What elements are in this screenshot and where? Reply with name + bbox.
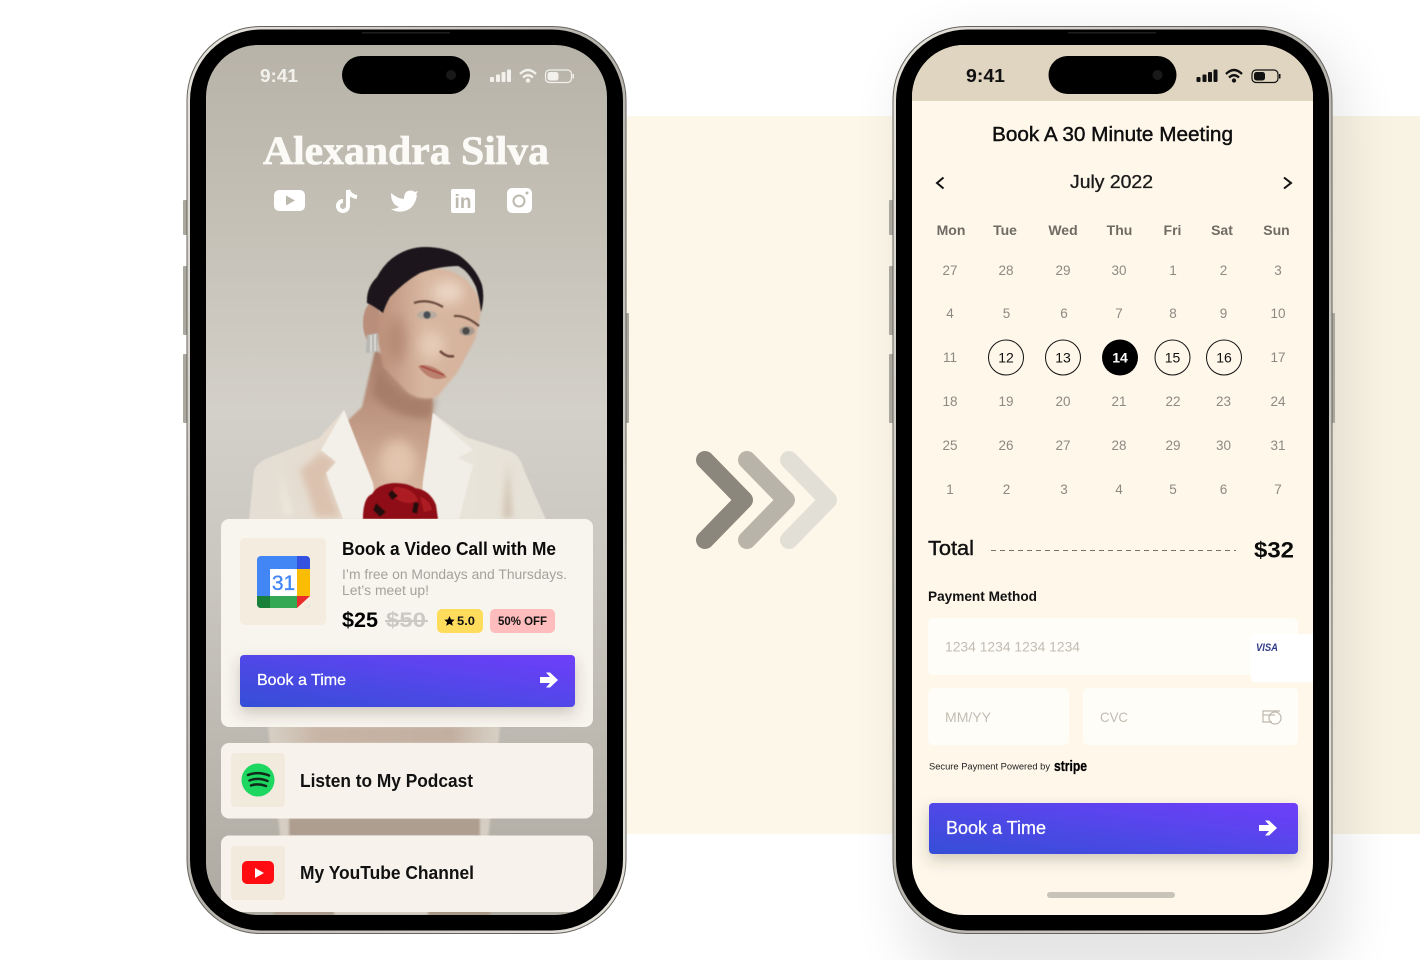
- month navigation: [937, 172, 1291, 192]
- icon: tiktok: [338, 190, 357, 211]
- weekday headers: Sun: [1263, 222, 1290, 238]
- cvc field: CVC: [1100, 709, 1128, 725]
- expiry field: MM/YY: [945, 709, 992, 725]
- card: book a video call: Book a Video Call with Me: [342, 539, 556, 559]
- calendar dates: 8: [1169, 306, 1177, 321]
- ear: [362, 304, 380, 340]
- weekday headers: [937, 222, 1290, 238]
- right status bar: 9:41: [966, 66, 1005, 86]
- nose: [440, 351, 454, 356]
- discount pill: 50% OFF: [498, 614, 547, 628]
- calendar dates: 1: [946, 482, 954, 497]
- available dates: 12: [998, 350, 1014, 366]
- total row: $32: [1254, 538, 1294, 562]
- stripe note: Secure Payment Powered by: [929, 762, 1050, 772]
- calendar dates: 4: [946, 306, 954, 321]
- calendar dates: 3: [1274, 263, 1282, 278]
- calendar dates: 18: [942, 394, 958, 409]
- wifi icon: [1226, 70, 1242, 82]
- brows: [414, 301, 479, 326]
- card number field: 1234 1234 1234 1234: [945, 638, 1080, 654]
- calendar dates: 10: [1270, 306, 1286, 321]
- icon: youtube: [274, 190, 305, 211]
- description: [342, 567, 567, 598]
- card number field: [928, 618, 1321, 682]
- calendar dates: 25: [942, 438, 958, 453]
- price: $25: [342, 609, 378, 632]
- calendar dates: 24: [1270, 394, 1286, 409]
- calendar dates: 21: [1111, 394, 1127, 409]
- calendar dates: 5: [1169, 482, 1177, 497]
- right phone: [889, 26, 1335, 934]
- left phone hardware frame: [183, 26, 629, 934]
- weekday headers: Sat: [1211, 222, 1233, 238]
- left phone screen: [206, 45, 607, 916]
- calendar dates: 22: [1165, 394, 1181, 409]
- rating pill: [437, 609, 483, 633]
- arrow: [1259, 820, 1277, 836]
- card: podcast: [221, 743, 593, 818]
- calendar dates: 29: [1165, 438, 1181, 453]
- calendar dates: 31: [1270, 438, 1286, 453]
- price: $50: [386, 609, 426, 632]
- calendar dates: 11: [943, 350, 957, 365]
- icon: twitter: [391, 190, 418, 212]
- cvc field: [1083, 688, 1298, 745]
- description: Let’s meet up!: [342, 583, 429, 598]
- jacket shading: [280, 452, 512, 518]
- card: podcast: Listen to My Podcast: [300, 771, 473, 791]
- battery icon: [546, 70, 574, 82]
- jacket: [249, 410, 546, 520]
- home indicator: [1047, 892, 1175, 898]
- calendar dates: 28: [1111, 438, 1127, 453]
- name heading: Alexandra Silva: [263, 128, 549, 173]
- total row: Total: [928, 538, 974, 560]
- icon: cvc card: [1263, 711, 1281, 724]
- battery icon: [1252, 70, 1280, 82]
- button: [240, 655, 575, 707]
- jaw shadow: [372, 368, 436, 418]
- right lapel: [420, 413, 473, 519]
- wifi icon: [520, 70, 536, 82]
- calendar dates: 2: [1220, 263, 1227, 278]
- expiry field: [928, 688, 1069, 745]
- stripe note: stripe: [1054, 758, 1087, 775]
- button: Book a Time: [257, 672, 346, 689]
- calendar dates: 23: [1216, 394, 1231, 409]
- face: [378, 268, 482, 399]
- left phone: [183, 26, 629, 934]
- calendar dates: 17: [1270, 350, 1286, 365]
- dynamic island: [1048, 56, 1176, 94]
- calendar dates: 7: [1115, 306, 1123, 321]
- stripe note: [929, 758, 1087, 775]
- right phone screen: [912, 45, 1321, 915]
- neck and chest: [348, 350, 434, 491]
- calendar dates: 26: [998, 438, 1014, 453]
- signal icon: [490, 70, 511, 82]
- card: youtube: [221, 836, 593, 912]
- hair: [367, 247, 483, 313]
- price: [342, 611, 428, 628]
- calendar dates: 27: [942, 263, 958, 278]
- dynamic island: [342, 56, 470, 94]
- background band: [626, 40, 1420, 960]
- card: youtube: My YouTube Channel: [300, 863, 474, 883]
- month navigation: July 2022: [1070, 172, 1153, 192]
- rose: [363, 483, 438, 519]
- icon: linkedin: in: [455, 192, 471, 213]
- face highlights: [387, 280, 464, 364]
- calendar dates: 29: [1055, 263, 1071, 278]
- calendar dates: 7: [1274, 482, 1282, 497]
- calendar dates: 30: [1111, 263, 1127, 278]
- icon: spotify: [242, 764, 274, 796]
- left status bar: [260, 68, 574, 84]
- arrows: [705, 460, 828, 540]
- right phone screen: Book A 30 Minute Meeting: [992, 124, 1233, 146]
- available dates: 15: [1165, 350, 1180, 366]
- lips: [418, 365, 447, 379]
- card number field: VISA: [1256, 642, 1278, 654]
- calendar dates: 3: [1060, 482, 1068, 497]
- weekday headers: Mon: [937, 222, 965, 238]
- calendar dates: 27: [1055, 438, 1071, 453]
- calendar dates: [942, 263, 1286, 497]
- rating pill: 5.0: [457, 614, 475, 628]
- calendar dates: 20: [1055, 394, 1071, 409]
- available dates: 13: [1055, 350, 1071, 366]
- calendar dates: 6: [1060, 306, 1068, 321]
- left status bar: 9:41: [260, 66, 298, 86]
- description: I’m free on Mondays and Thursdays.: [342, 567, 567, 582]
- calendar icon tile: 31: [272, 572, 295, 595]
- eyes: [417, 311, 474, 336]
- calendar dates: 4: [1115, 482, 1123, 497]
- arrow: [540, 672, 558, 688]
- portrait photo: [249, 247, 546, 916]
- right phone screen: Payment Method: [928, 588, 1037, 604]
- calendar dates: 9: [1220, 306, 1227, 321]
- weekday headers: Tue: [993, 222, 1017, 238]
- available dates: [988, 340, 1242, 375]
- icon: instagram: [507, 188, 532, 213]
- calendar dates: 1: [1169, 263, 1177, 278]
- discount pill: [490, 609, 555, 633]
- available dates: 16: [1216, 350, 1232, 366]
- button: [929, 803, 1298, 854]
- social icons: [274, 188, 532, 213]
- calendar dates: 28: [998, 263, 1014, 278]
- calendar dates: 2: [1003, 482, 1010, 497]
- lower body behind cards: [268, 727, 500, 915]
- collarbone highlight: [380, 440, 416, 484]
- selected date: 14: [1112, 350, 1128, 366]
- right status bar: [912, 45, 1313, 101]
- card: book a video call: [221, 519, 593, 727]
- weekday headers: Fri: [1164, 222, 1181, 238]
- left lapel: [321, 410, 378, 519]
- upper body: [249, 247, 546, 520]
- signal icon: [1196, 70, 1218, 82]
- button: Book a Time: [946, 818, 1046, 838]
- icon: youtube red: [242, 861, 274, 884]
- calendar dates: 6: [1220, 482, 1227, 497]
- calendar dates: 30: [1216, 438, 1231, 453]
- weekday headers: Wed: [1048, 222, 1078, 238]
- weekday headers: Thu: [1107, 222, 1132, 238]
- earring: [366, 333, 378, 353]
- total row: [928, 538, 1294, 562]
- selected date: [1102, 340, 1138, 376]
- calendar dates: 5: [1003, 306, 1010, 321]
- icon: linkedin: [451, 189, 475, 213]
- calendar dates: 19: [998, 394, 1014, 409]
- right phone hardware frame: [889, 26, 1335, 934]
- calendar icon tile: [240, 538, 326, 625]
